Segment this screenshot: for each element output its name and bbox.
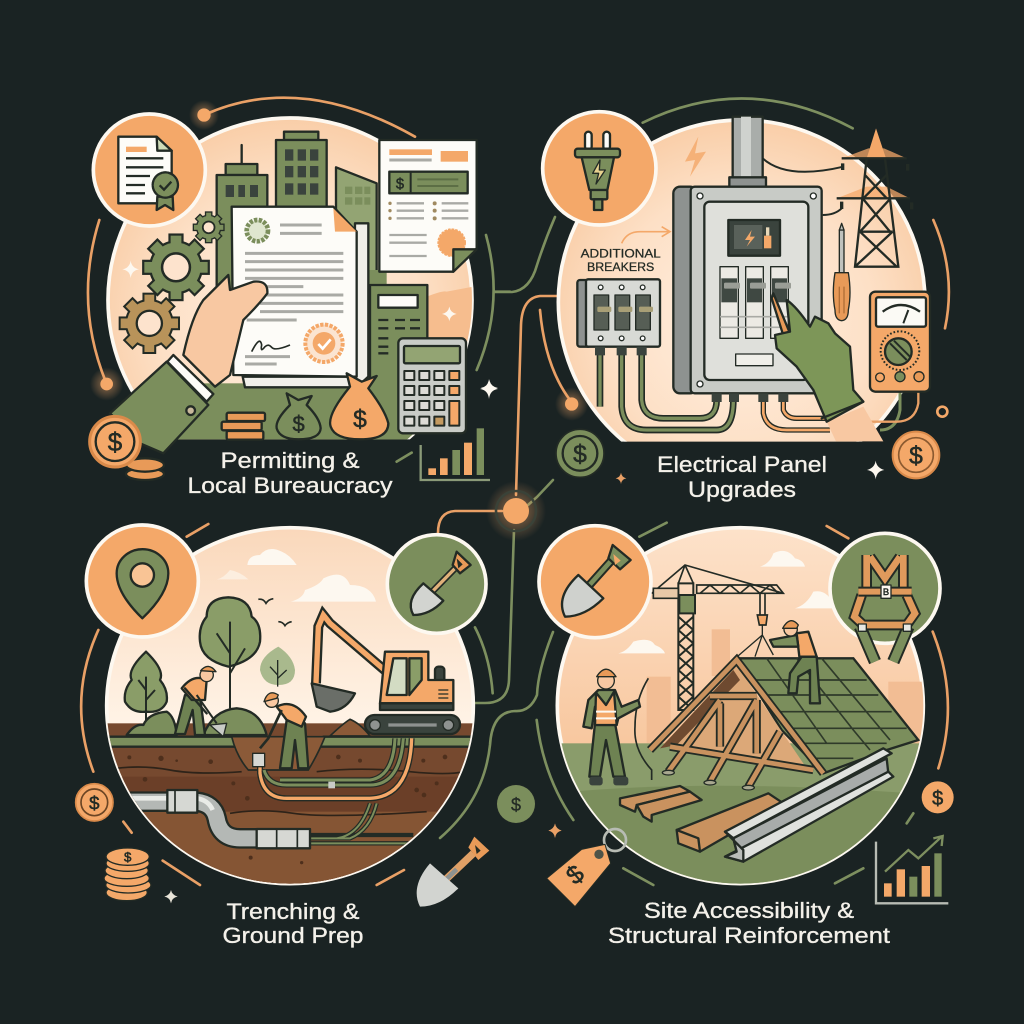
money and calculator: $: [293, 412, 305, 437]
hand holding document: [110, 275, 267, 453]
orbit arcs: [537, 523, 948, 885]
icon: coin left: $: [89, 792, 100, 813]
icon: coin right: [922, 781, 954, 813]
icon: green dollar coin: $: [511, 795, 521, 815]
multimeter: [870, 292, 930, 392]
permit form: $: [396, 176, 404, 192]
heading: electrical: Upgrades: [688, 477, 796, 502]
peach disc: [106, 116, 474, 440]
power lines: [763, 158, 843, 215]
additional breakers: [577, 227, 670, 355]
panel: electrical panel upgrades: [540, 99, 949, 502]
icon: coin right: $: [932, 788, 943, 810]
screwdriver: [833, 223, 850, 321]
icon: location pin: [86, 525, 198, 637]
gloved hand: [772, 293, 883, 441]
icon: coin green: [556, 429, 604, 477]
orbit arcs: [81, 524, 493, 885]
additional breakers: BREAKERS: [587, 260, 654, 274]
trees: [125, 597, 295, 735]
orbit arcs: [88, 98, 510, 401]
heading: site: Structural Reinforcement: [608, 923, 890, 948]
icon: dollar coins: [90, 416, 164, 480]
heading: electrical: Electrical Panel: [657, 452, 827, 477]
money and calculator: [222, 338, 466, 440]
icon: coin green: $: [573, 441, 587, 468]
additional breakers: ADDITIONAL: [581, 246, 661, 260]
icon: free shovel: [417, 837, 489, 907]
sparkles: [122, 261, 498, 397]
icon: power plug: [543, 112, 656, 225]
central connector lines: [438, 217, 558, 838]
heading: site: Site Accessibility &: [644, 898, 854, 923]
sky disc: [557, 528, 923, 884]
timber frame: [650, 660, 823, 790]
heading: permitting: [188, 448, 392, 498]
icon: price tag: [547, 829, 626, 907]
worker standing: [583, 669, 652, 785]
crane: [652, 565, 783, 710]
coin stack: [104, 848, 151, 901]
icon: coin orange: [893, 432, 939, 478]
permit form: [379, 140, 477, 272]
bar chart: [397, 428, 490, 480]
electrical panel box: [673, 187, 822, 402]
worker on roof: [770, 621, 820, 703]
trenching illustration: [76, 524, 493, 907]
heading: trenching: Ground Prep: [222, 923, 364, 948]
icon: sparkle: [164, 890, 178, 903]
main pipe: [310, 803, 413, 843]
heading: permitting: Local Bureaucracy: [188, 473, 392, 498]
icon: green dollar coin: [496, 784, 536, 824]
signed document: [232, 207, 368, 387]
icon: price tag: $: [561, 860, 590, 890]
icon: safety harness: B: [883, 587, 889, 597]
excavator: [312, 615, 460, 734]
conduit pipe: [729, 117, 766, 187]
steel i-beam: [725, 748, 893, 862]
worker with shovel: [175, 666, 227, 737]
panel: permitting and local bureaucracy: [88, 98, 510, 498]
heading: electrical: [657, 452, 827, 502]
line chart icon: [876, 836, 948, 903]
site illustration: [537, 523, 954, 907]
icon: shovel badge: [387, 535, 486, 633]
panel: site accessibility and structural reinforcement: [537, 523, 954, 948]
heading: trenching: [222, 899, 364, 948]
icon: sparkle: [548, 823, 562, 838]
underground conduits: [260, 738, 412, 798]
landscape: [93, 549, 493, 892]
icon: coin orange: $: [909, 443, 923, 470]
city and ground: [170, 132, 473, 445]
coin stack: $: [124, 849, 132, 864]
icon: safety harness: [830, 533, 940, 662]
electrical illustration: [540, 99, 949, 484]
icon: coin left: [76, 784, 113, 821]
sparkles: [616, 461, 884, 484]
sky disc: [107, 528, 473, 884]
lightning mark: [685, 137, 706, 177]
wires: [600, 355, 918, 430]
heading: permitting: Permitting &: [220, 448, 360, 473]
gears: [121, 213, 223, 352]
power tower: [837, 128, 912, 267]
roof: [737, 658, 918, 773]
icon: certificate badge: [93, 114, 205, 226]
permitting illustration: [88, 98, 510, 482]
peach disc: [556, 118, 926, 442]
heading: trenching: Trenching &: [226, 899, 360, 924]
icon: sparkle centre: [480, 379, 498, 399]
worker digging: [260, 693, 308, 768]
scene: [562, 550, 924, 884]
icon: dollar coins: $: [108, 427, 123, 457]
orbit arcs: [540, 99, 949, 421]
timber stack: [620, 786, 783, 852]
heading: site: [608, 898, 890, 948]
money and calculator: $: [353, 406, 367, 433]
panel: trenching and ground prep: [76, 524, 493, 948]
icon: shovel badge orange: [539, 526, 651, 638]
